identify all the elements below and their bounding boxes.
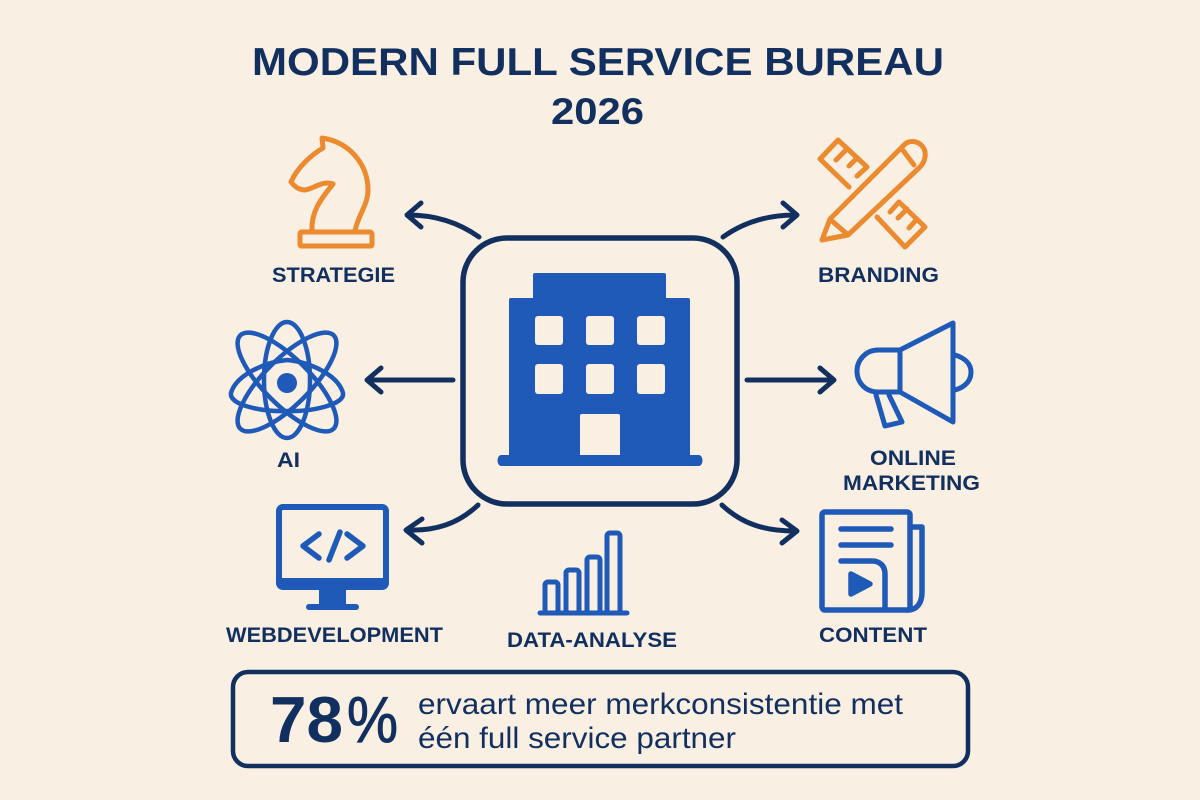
icon: chess knight — [291, 138, 372, 246]
panel: webdevelopment — [226, 507, 443, 647]
panel: strategie — [272, 138, 395, 287]
arrow: to online marketing — [747, 368, 834, 392]
callout text — [418, 688, 904, 755]
callout text: één full service partner — [418, 722, 736, 755]
label: ONLINE — [870, 447, 956, 470]
icon: atom — [224, 319, 350, 445]
label: DATA-ANALYSE — [507, 629, 677, 652]
callout text: ervaart meer merkconsistentie met — [418, 688, 904, 721]
icon: monitor with code — [277, 507, 388, 610]
label: CONTENT — [819, 624, 927, 647]
icon: bar chart — [540, 533, 627, 613]
arrow: to AI — [367, 368, 453, 392]
panel: data-analyse — [507, 533, 677, 652]
central rounded frame — [463, 238, 737, 504]
callout frame — [233, 672, 968, 766]
panel: branding — [818, 140, 939, 287]
label: AI — [277, 449, 300, 472]
label: WEBDEVELOPMENT — [226, 624, 443, 647]
panel: AI — [224, 319, 350, 472]
title: MODERN FULL SERVICE BUREAU — [252, 41, 944, 84]
icon: office building — [498, 273, 702, 466]
label — [843, 447, 980, 495]
icon: crossed ruler and pencil — [820, 140, 925, 247]
title: 2026 — [551, 91, 644, 132]
statistic: 78%: 78 — [270, 683, 343, 756]
label: MARKETING — [843, 472, 980, 495]
arrow: to webdevelopment — [406, 505, 478, 543]
label: STRATEGIE — [272, 264, 395, 287]
panel: central building — [463, 238, 737, 504]
arrow: to branding — [723, 203, 797, 237]
statistic: 78%: % — [347, 683, 398, 756]
panel: content — [819, 512, 927, 647]
arrow: to strategie — [407, 203, 479, 237]
icon: document with play button — [822, 512, 922, 610]
callout — [233, 672, 968, 766]
statistic: 78% — [270, 683, 398, 756]
arrow: to content — [722, 505, 797, 543]
label: BRANDING — [818, 264, 939, 287]
icon: megaphone — [857, 323, 971, 426]
title — [252, 41, 944, 132]
panel: online marketing — [843, 323, 980, 495]
